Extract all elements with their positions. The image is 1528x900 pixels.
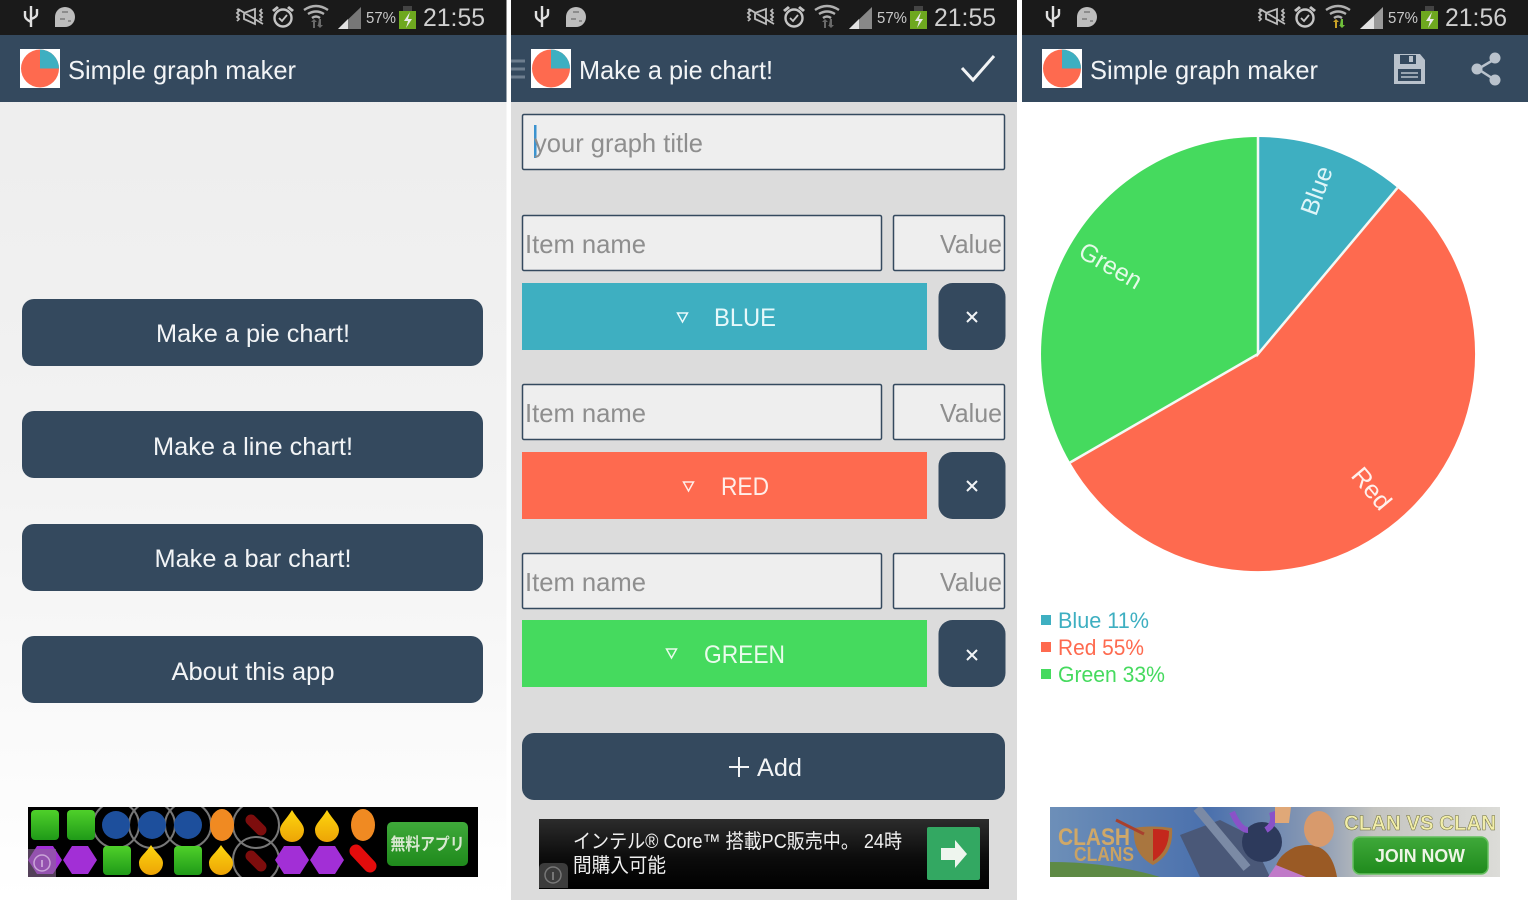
header bar: home screen — [0, 35, 506, 102]
input: graph title — [522, 114, 1004, 170]
button: make a pie chart — [22, 299, 483, 366]
panel: pie chart result — [1022, 0, 1528, 900]
item row: red: RED — [721, 473, 769, 501]
ad banner: intel core — [539, 819, 989, 889]
button: about this app: About this app — [172, 658, 334, 686]
button: add — [522, 733, 1005, 800]
pie chart — [1041, 137, 1475, 571]
ad banner: intel core: インテル® Core™ 搭載PC販売中。 24時 — [573, 830, 902, 853]
item row: green: Item name — [525, 567, 646, 597]
status bar: form screen: 21:55 — [934, 4, 996, 32]
legend: Green 33% — [1058, 662, 1165, 687]
input: graph title: your graph title — [534, 128, 703, 158]
status bar: home screen — [0, 0, 506, 35]
item row: blue: Item name — [525, 229, 646, 259]
icon: share — [1472, 52, 1500, 86]
legend: Red 55% — [1058, 635, 1144, 660]
header bar: form screen: Make a pie chart! — [579, 55, 773, 85]
legend: Blue 11% — [1058, 608, 1149, 633]
panel: pie chart form — [511, 0, 1017, 900]
legend — [1041, 608, 1165, 687]
item row: blue: Value — [940, 229, 1002, 259]
item row: red: Item name — [525, 398, 646, 428]
ad banner: clash of clans: CLASH — [1058, 824, 1130, 851]
ad banner: intel core: 間購入可能 — [573, 854, 666, 877]
button: make a bar chart: Make a bar chart! — [154, 545, 352, 573]
status bar: form screen: 57% — [877, 10, 907, 27]
status bar: home screen: 57% — [366, 10, 396, 27]
header bar: form screen — [511, 35, 1017, 102]
status bar: result screen — [1022, 0, 1528, 35]
item row: green — [522, 554, 1006, 687]
button: make a line chart: Make a line chart! — [153, 433, 353, 461]
ad banner: clash of clans: CLAN VS CLAN — [1344, 812, 1496, 835]
status bar: result screen: 57% — [1388, 10, 1418, 27]
slice label: blue: Blue — [1295, 162, 1339, 219]
button: make a bar chart — [22, 524, 483, 591]
panel: home screen — [0, 0, 506, 900]
button: make a pie chart: Make a pie chart! — [156, 320, 350, 348]
ad banner: candy game: 無料アプリ — [390, 835, 464, 854]
status bar: home screen: 21:55 — [423, 4, 485, 32]
header bar: home screen: Simple graph maker — [68, 55, 296, 85]
ad banner: clash of clans — [1050, 807, 1500, 877]
icon: save — [1394, 54, 1425, 84]
button: about this app — [22, 636, 483, 703]
item row: blue — [522, 216, 1006, 350]
button: make a line chart — [22, 411, 483, 478]
item row: green: Value — [940, 567, 1002, 597]
button: add: Add — [757, 754, 802, 782]
item row: blue: BLUE — [714, 304, 776, 332]
status bar: form screen — [511, 0, 1017, 35]
ad banner: clash of clans: JOIN NOW — [1375, 846, 1465, 866]
slice label: green: Green — [1074, 237, 1147, 295]
item row: red: Value — [940, 398, 1002, 428]
ad banner: candy game — [28, 807, 478, 877]
header bar: result screen — [1022, 35, 1528, 102]
ad banner: clash of clans: CLANS — [1074, 844, 1134, 866]
item row: green: GREEN — [704, 641, 785, 669]
slice label: red: Red — [1345, 462, 1397, 516]
item row: red — [522, 384, 1006, 519]
header bar: result screen: Simple graph maker — [1090, 55, 1318, 85]
status bar: result screen: 21:56 — [1445, 4, 1507, 32]
